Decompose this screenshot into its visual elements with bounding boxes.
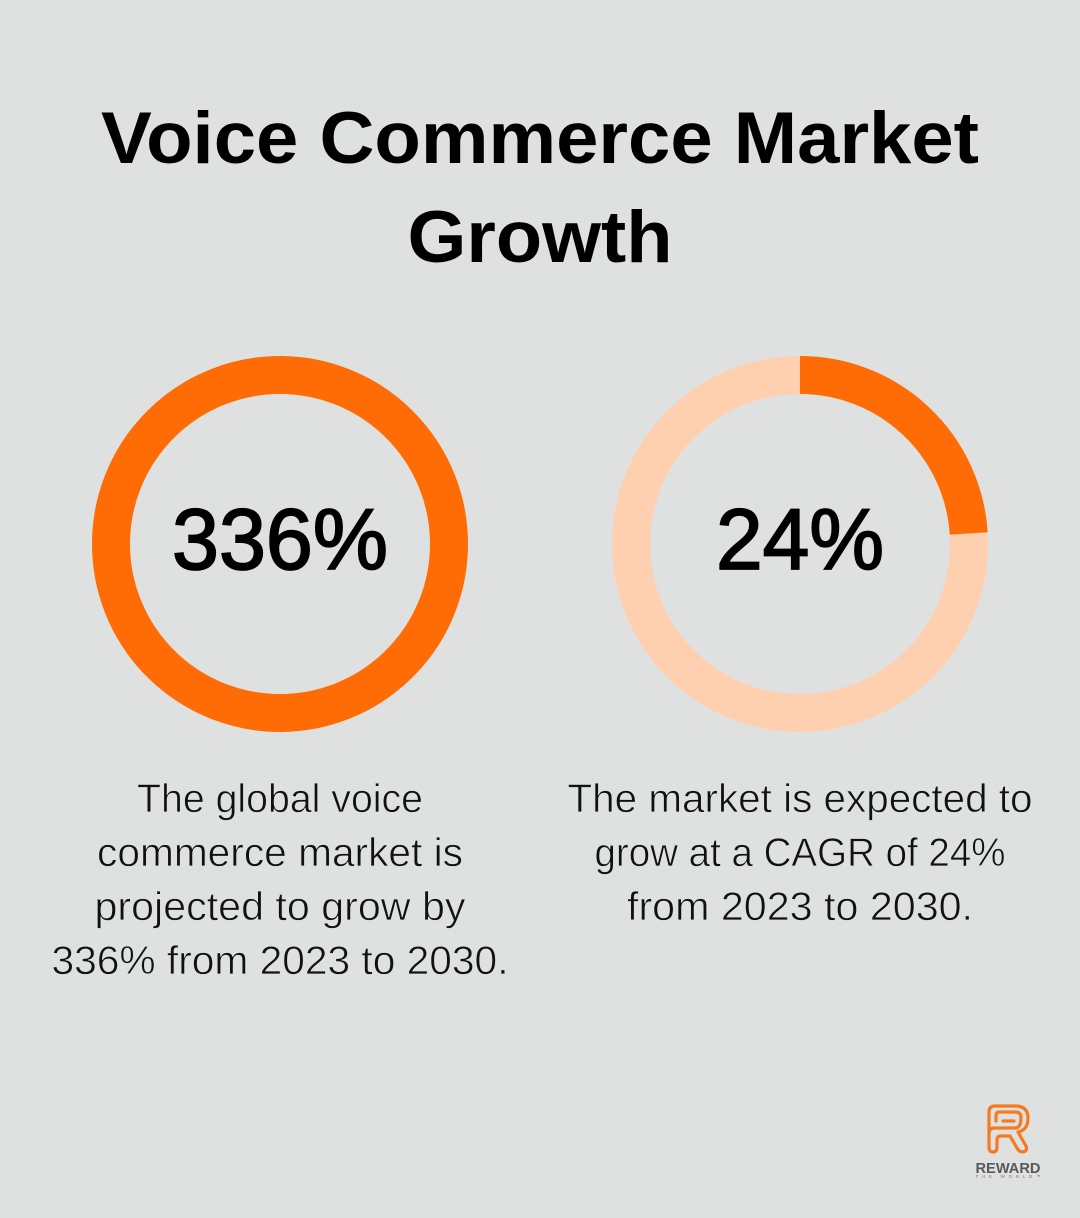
description: CAGR: The market is expected to bbox=[568, 777, 1032, 821]
title bbox=[101, 98, 979, 278]
description: global market growth: 336% from 2023 to 2030. bbox=[52, 939, 508, 983]
panel: 336% stat bbox=[52, 375, 508, 983]
donut chart: 24% of ring bbox=[631, 375, 969, 713]
description: global market growth: The global voice bbox=[137, 777, 423, 821]
description: CAGR bbox=[568, 777, 1032, 929]
tagline: THE WORLD: THE WORLD™ bbox=[976, 1174, 1040, 1179]
icon: R mark bbox=[989, 1106, 1028, 1152]
panel: 24% stat bbox=[568, 375, 1032, 929]
description: global market growth bbox=[52, 777, 508, 983]
logo: Reward the World bbox=[976, 1106, 1040, 1179]
title: Voice Commerce Market bbox=[101, 98, 979, 179]
wordmark: REWARD: REWARD bbox=[976, 1161, 1040, 1177]
description: global market growth: projected to grow by bbox=[94, 885, 466, 929]
description: CAGR: grow at a CAGR of 24% bbox=[594, 831, 1006, 875]
value: 336%: 336% bbox=[172, 492, 388, 588]
value: 24%: 24% bbox=[716, 492, 884, 588]
description: CAGR: from 2023 to 2030. bbox=[627, 885, 973, 929]
donut chart: 336% full ring bbox=[111, 375, 449, 713]
title: Growth bbox=[408, 197, 672, 278]
description: global market growth: commerce market is bbox=[97, 831, 463, 875]
